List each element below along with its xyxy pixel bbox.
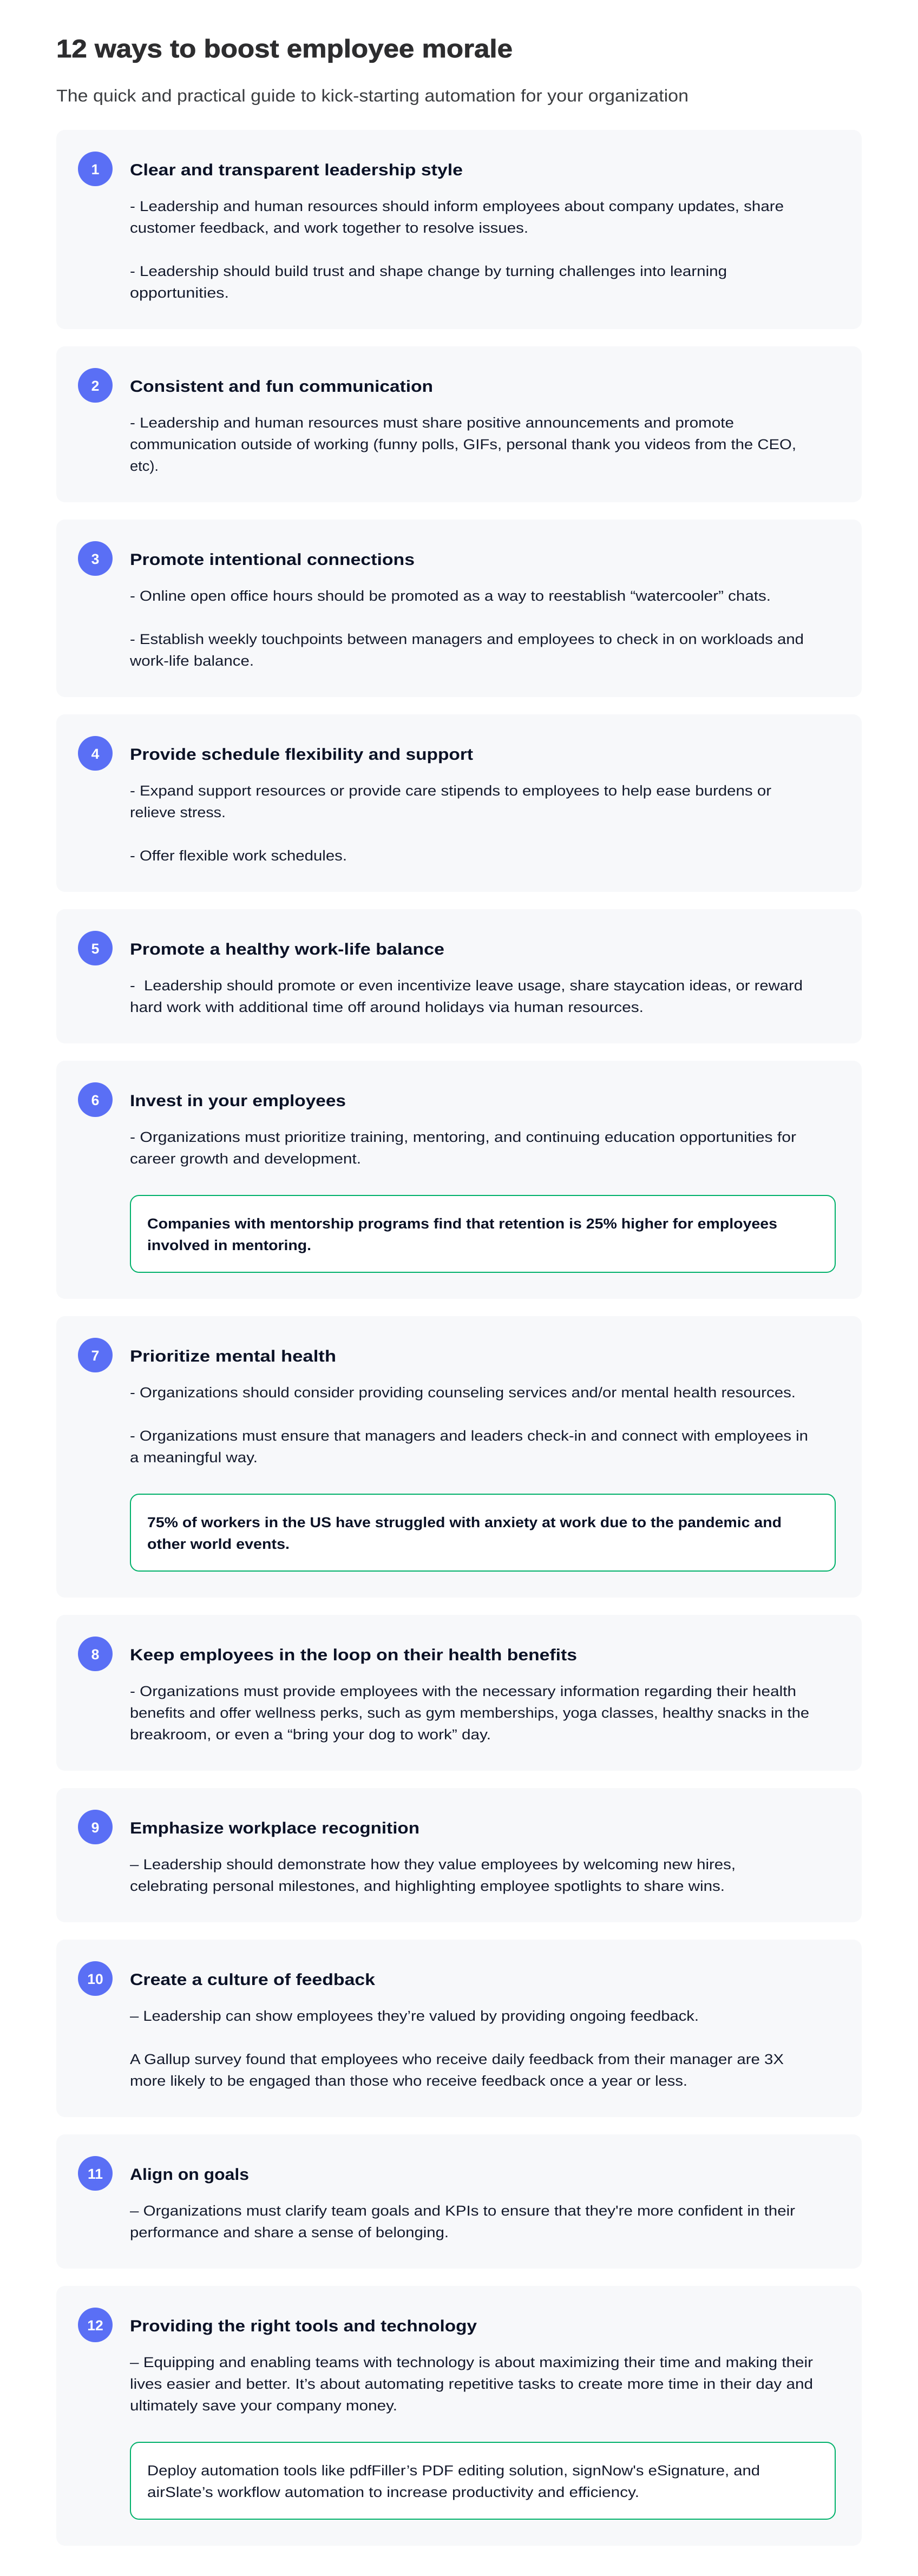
text block: tip 7: a meaningful way. bbox=[130, 1449, 258, 1466]
heading: tip 2: Consistent and fun communication bbox=[130, 378, 433, 396]
callout: automation tools: airSlate’s workflow automation to increase productivity and efficiency. bbox=[147, 2484, 639, 2500]
panel: tip 9 bbox=[56, 1788, 862, 1922]
icon: number badge 6 bbox=[78, 1082, 113, 1117]
text block: tip 1: - Leadership and human resources should inform employees about company updates, share bbox=[130, 198, 784, 214]
text block: tip 1: customer feedback, and work together to resolve issues. bbox=[130, 220, 528, 236]
heading: tip 1: Clear and transparent leadership style bbox=[130, 161, 463, 179]
panel: tip 2 bbox=[56, 346, 862, 502]
text block: tip 2: communication outside of working (funny polls, GIFs, personal thank you videos from the CEO, bbox=[130, 436, 796, 452]
text block: tip 10: more likely to be engaged than those who receive feedback once a year or less. bbox=[130, 2073, 687, 2089]
text block: tip 1: opportunities. bbox=[130, 285, 229, 301]
panel: tip 10 bbox=[56, 1940, 862, 2117]
icon: number badge 1 bbox=[78, 152, 113, 186]
text block: tip 12: lives easier and better. It’s about automating repetitive tasks to create more time in their day and bbox=[130, 2376, 813, 2392]
icon: number badge 2 bbox=[78, 368, 113, 403]
icon: number badge 9 bbox=[78, 1810, 113, 1844]
heading: tip 11: Align on goals bbox=[130, 2166, 249, 2184]
subtitle: The quick and practical guide to kick-starting automation for your organization bbox=[56, 86, 688, 105]
icon: number badge 11 bbox=[78, 2156, 113, 2191]
callout: automation tools bbox=[130, 2442, 835, 2519]
icon: number badge 9: 9 bbox=[91, 1819, 99, 1836]
panel: tip 6 bbox=[56, 1061, 862, 1299]
text block: tip 7 bbox=[130, 1384, 808, 1466]
icon: number badge 1: 1 bbox=[91, 161, 99, 178]
text block: tip 3: - Online open office hours should be promoted as a way to reestablish “watercooler” chats. bbox=[130, 588, 771, 604]
text block: tip 10 bbox=[130, 2008, 784, 2089]
icon: number badge 6: 6 bbox=[91, 1092, 99, 1108]
icon: number badge 7 bbox=[78, 1338, 113, 1372]
panel: tip 7 bbox=[56, 1316, 862, 1598]
icon: number badge 4: 4 bbox=[91, 746, 100, 762]
icon: number badge 3: 3 bbox=[91, 551, 99, 567]
heading: tip 9: Emphasize workplace recognition bbox=[130, 1819, 419, 1837]
text block: tip 6: - Organizations must prioritize training, mentoring, and continuing education opportunities for bbox=[130, 1129, 796, 1145]
text block: tip 4 bbox=[130, 783, 771, 864]
text block: tip 5: hard work with additional time off around holidays via human resources. bbox=[130, 999, 644, 1015]
icon: number badge 7: 7 bbox=[91, 1348, 99, 1364]
text block: tip 2: - Leadership and human resources must share positive announcements and promote bbox=[130, 415, 734, 431]
icon: number badge 5: 5 bbox=[91, 941, 99, 957]
panel: tip 8 bbox=[56, 1615, 862, 1771]
panel: tip 11 bbox=[56, 2134, 862, 2269]
callout: mentorship statistic: involved in mentoring. bbox=[147, 1237, 311, 1253]
icon: number badge 10: 10 bbox=[87, 1971, 103, 1987]
icon: number badge 4 bbox=[78, 736, 113, 771]
icon: number badge 8 bbox=[78, 1637, 113, 1671]
text block: tip 11 bbox=[130, 2203, 795, 2240]
text block: tip 10: – Leadership can show employees they’re valued by providing ongoing feedback. bbox=[130, 2008, 699, 2024]
text block: tip 3 bbox=[129, 588, 804, 669]
text block: tip 12 bbox=[130, 2354, 813, 2414]
icon: number badge 3 bbox=[78, 541, 113, 576]
text block: tip 4: relieve stress. bbox=[130, 804, 226, 820]
heading: tip 10: Create a culture of feedback bbox=[130, 1971, 375, 1989]
text block: tip 6 bbox=[130, 1129, 796, 1167]
text block: tip 8: benefits and offer wellness perks, such as gym memberships, yoga classes, healthy snacks in the bbox=[130, 1705, 809, 1721]
text block: tip 1: - Leadership should build trust and shape change by turning challenges into learning bbox=[130, 263, 727, 279]
callout: automation tools: Deploy automation tools like pdfFiller’s PDF editing solution, signNow's eSignature, and bbox=[147, 2462, 760, 2479]
callout: anxiety statistic: 75% of workers in the US have struggled with anxiety at work due to the pandemic and bbox=[147, 1514, 782, 1530]
text block: tip 7: - Organizations should consider providing counseling services and/or mental health resources. bbox=[130, 1384, 796, 1401]
text block: tip 4: - Expand support resources or provide care stipends to employees to help ease burdens or bbox=[130, 783, 771, 799]
heading: tip 8: Keep employees in the loop on their health benefits bbox=[130, 1646, 577, 1664]
callout: anxiety statistic bbox=[130, 1494, 835, 1571]
text block: tip 3: - Establish weekly touchpoints between managers and employees to check in on workloads and bbox=[130, 631, 804, 647]
text block: tip 5 bbox=[130, 977, 803, 1015]
text block: tip 3: work-life balance. bbox=[129, 653, 254, 669]
text block: tip 10: A Gallup survey found that employees who receive daily feedback from their manager are 3X bbox=[130, 2051, 784, 2067]
heading: tip 12: Providing the right tools and technology bbox=[130, 2317, 477, 2335]
icon: number badge 12 bbox=[78, 2308, 113, 2342]
icon: number badge 12: 12 bbox=[87, 2317, 103, 2334]
heading: tip 4: Provide schedule flexibility and support bbox=[130, 746, 473, 764]
text block: tip 2: etc). bbox=[130, 458, 159, 474]
icon: number badge 2: 2 bbox=[91, 378, 99, 394]
text block: tip 12: – Equipping and enabling teams with technology is about maximizing their time and making their bbox=[130, 2354, 813, 2370]
title: 12 ways to boost employee morale bbox=[56, 34, 513, 63]
text block: tip 8: breakroom, or even a “bring your dog to work” day. bbox=[130, 1726, 491, 1743]
heading: tip 3: Promote intentional connections bbox=[130, 551, 415, 569]
text block: tip 1 bbox=[130, 198, 784, 301]
callout: anxiety statistic: other world events. bbox=[147, 1536, 290, 1552]
callout: mentorship statistic bbox=[130, 1195, 835, 1272]
panel: tip 12 bbox=[56, 2286, 862, 2546]
text block: tip 7: - Organizations must ensure that managers and leaders check-in and connect with employees in bbox=[130, 1428, 808, 1444]
text block: tip 5: - Leadership should promote or even incentivize leave usage, share staycation ideas, or reward bbox=[130, 977, 803, 994]
icon: number badge 11: 11 bbox=[88, 2166, 103, 2182]
heading: tip 5: Promote a healthy work-life balance bbox=[130, 941, 444, 958]
icon: number badge 5 bbox=[78, 931, 113, 965]
icon: number badge 8: 8 bbox=[91, 1646, 99, 1662]
panel: tip 5 bbox=[56, 909, 862, 1043]
text block: tip 12: ultimately save your company money. bbox=[130, 2397, 397, 2414]
text block: tip 6: career growth and development. bbox=[130, 1151, 361, 1167]
text block: tip 8 bbox=[130, 1683, 809, 1743]
panel: tip 1 bbox=[56, 130, 862, 329]
text block: tip 11: – Organizations must clarify team goals and KPIs to ensure that they're more confident in their bbox=[130, 2203, 795, 2219]
text block: tip 9: celebrating personal milestones, and highlighting employee spotlights to share wins. bbox=[130, 1878, 725, 1894]
panel: tip 4 bbox=[56, 714, 862, 892]
text block: tip 9 bbox=[130, 1856, 736, 1894]
callout: mentorship statistic: Companies with mentorship programs find that retention is 25% higher for employees bbox=[147, 1215, 777, 1232]
text block: tip 8: - Organizations must provide employees with the necessary information regarding their health bbox=[130, 1683, 796, 1699]
text block: tip 2 bbox=[130, 415, 796, 474]
text block: tip 11: performance and share a sense of belonging. bbox=[130, 2224, 449, 2240]
panel: tip 3 bbox=[56, 520, 862, 697]
text block: tip 4: - Offer flexible work schedules. bbox=[130, 847, 347, 864]
heading: tip 6: Invest in your employees bbox=[130, 1092, 346, 1110]
text block: tip 9: – Leadership should demonstrate how they value employees by welcoming new hires, bbox=[130, 1856, 736, 1872]
heading: tip 7: Prioritize mental health bbox=[130, 1348, 336, 1365]
icon: number badge 10 bbox=[78, 1961, 113, 1996]
